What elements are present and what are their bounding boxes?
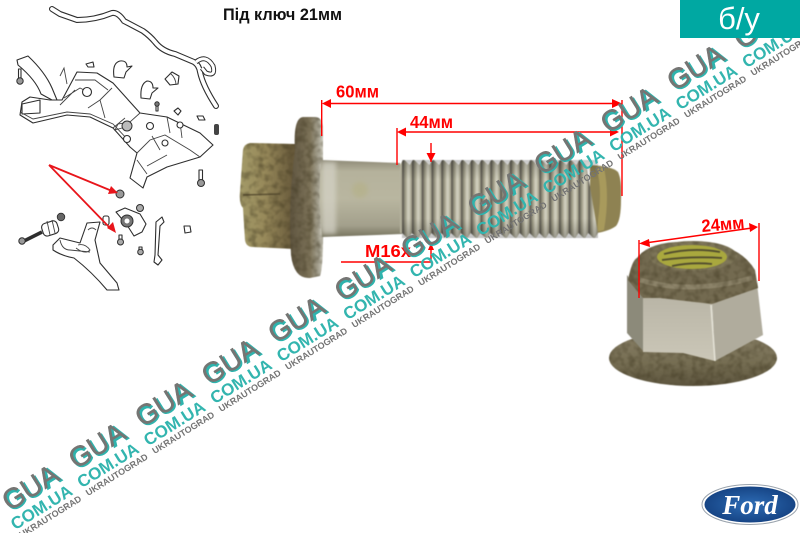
dimension: M16 thread: M16x <box>365 241 411 261</box>
watermark 10: GUA <box>595 80 663 139</box>
subframe <box>17 56 213 188</box>
watermark 9 <box>524 118 616 205</box>
bolt head and flange <box>240 117 323 278</box>
watermark 8: COM.UA <box>473 187 541 240</box>
watermark 10 <box>590 76 682 163</box>
watermark 7: COM.UA <box>406 229 475 282</box>
bushing, bolt and side hardware <box>19 190 191 265</box>
nut flange <box>609 330 777 386</box>
watermark 11: GUA <box>661 38 729 97</box>
watermark 9: GUA <box>530 123 599 182</box>
watermark 2: GUA <box>63 416 131 475</box>
bolt shank, threads and tip <box>320 160 621 238</box>
dimension: 24мм <box>639 212 759 298</box>
watermark 11: COM.UA <box>672 61 741 114</box>
dimension: 60мм <box>322 82 622 196</box>
watermark 6: GUA <box>330 249 400 308</box>
watermark 7: UKRAUTOGRAD <box>416 241 483 288</box>
clamps and small hardware <box>17 61 219 186</box>
watermark 7: GUA <box>397 207 466 266</box>
watermark 5: UKRAUTOGRAD <box>283 325 350 372</box>
bolt photograph <box>240 117 621 278</box>
watermark 4: UKRAUTOGRAD <box>217 367 283 414</box>
suspension exploded diagram <box>17 9 219 290</box>
watermark 6 <box>324 244 416 331</box>
badge: used condition: б/у <box>718 1 760 36</box>
watermark 7: GUA <box>395 206 463 265</box>
watermark 3: GUA <box>129 374 197 433</box>
watermark 2: COM.UA <box>74 439 142 492</box>
dimension: 44мм: 44мм <box>410 112 453 132</box>
watermark 8: UKRAUTOGRAD <box>483 199 549 246</box>
watermark 12 <box>723 0 800 79</box>
watermark 3: UKRAUTOGRAD <box>150 409 217 456</box>
watermark 10: COM.UA <box>606 103 674 156</box>
dimension: 60мм: 60мм <box>336 82 379 102</box>
watermark 10: UKRAUTOGRAD <box>616 115 682 162</box>
watermark 11 <box>657 34 749 121</box>
watermark 4 <box>191 328 283 415</box>
watermark 10: GUA <box>596 81 666 140</box>
watermark 6: GUA <box>329 248 397 307</box>
watermark 8 <box>457 160 549 247</box>
watermark 11: GUA <box>663 39 732 98</box>
watermark 6: COM.UA <box>340 271 408 324</box>
watermark 4: GUA <box>197 333 267 392</box>
watermark 5 <box>258 286 350 373</box>
dimension: M16 thread <box>341 143 436 262</box>
dimension: 44мм <box>397 112 619 165</box>
nut hex faces <box>627 275 763 361</box>
badge: used condition <box>680 0 800 38</box>
watermark 5: COM.UA <box>273 313 342 366</box>
watermark 9: UKRAUTOGRAD <box>549 157 616 204</box>
logo: Ford: Ford <box>721 490 778 520</box>
watermark 5: GUA <box>262 290 330 349</box>
watermark 5: GUA <box>264 291 333 350</box>
watermark 8: GUA <box>463 165 533 224</box>
red arrows to bolt and nut <box>49 165 118 233</box>
watermark 1: GUA <box>0 459 67 518</box>
watermark 11: UKRAUTOGRAD <box>682 73 749 120</box>
watermark 8: GUA <box>462 164 530 223</box>
watermark 4: COM.UA <box>207 355 275 408</box>
nut collar <box>628 241 758 304</box>
watermark 4: GUA <box>196 332 264 391</box>
watermark 7 <box>391 202 483 289</box>
watermark 3: COM.UA <box>140 397 209 450</box>
lower control arm <box>53 216 119 290</box>
nut locking insert <box>657 245 727 269</box>
watermark 1: COM.UA <box>7 481 76 533</box>
watermark 2 <box>58 412 150 499</box>
title: Під ключ 21мм <box>223 6 342 24</box>
watermark 2: GUA <box>64 417 134 476</box>
logo: Ford <box>702 484 798 524</box>
watermark 6: UKRAUTOGRAD <box>350 283 416 330</box>
watermark 9: COM.UA <box>539 145 608 198</box>
stabilizer bar <box>52 9 216 106</box>
watermark 9: GUA <box>528 122 596 181</box>
watermark 3: GUA <box>131 375 200 434</box>
dimension: 24мм: 24мм <box>701 212 745 236</box>
watermark 3 <box>125 370 217 457</box>
nut photograph <box>609 241 777 386</box>
watermark 1 <box>0 454 84 533</box>
watermark 2: UKRAUTOGRAD <box>84 451 150 498</box>
